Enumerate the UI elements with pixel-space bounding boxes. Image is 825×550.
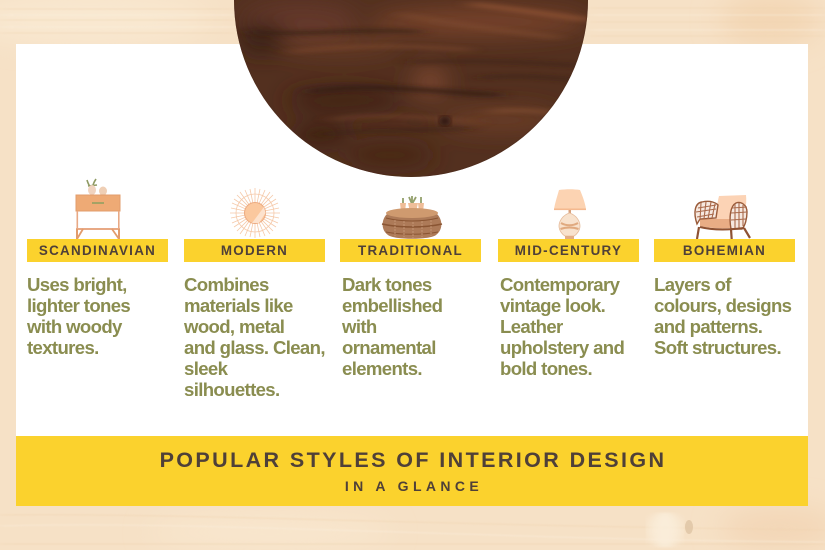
text: Traditional description: embellished — [342, 295, 442, 316]
text: Modern description: Combines — [184, 274, 269, 295]
text: Traditional description: Dark tones — [342, 274, 432, 295]
label: Modern: MODERN — [221, 243, 288, 258]
icon: scandinavian nightstand — [76, 178, 120, 239]
label: Mid-Century — [498, 239, 639, 262]
text: Modern description: materials like — [184, 295, 293, 316]
text: Mid-Century description: vintage look. — [500, 295, 605, 316]
text: Modern description: wood, metal — [184, 316, 284, 337]
text: Bohemian description: Soft structures. — [654, 337, 781, 358]
label: Bohemian: BOHEMIAN — [683, 243, 766, 258]
text: Bohemian description: colours, designs — [654, 295, 791, 316]
text: Modern description: and glass. Clean, — [184, 337, 325, 358]
icon: traditional wicker table — [382, 196, 442, 239]
label: Traditional — [340, 239, 481, 262]
text: Traditional description: with — [342, 316, 377, 337]
icon: modern sunburst mirror — [230, 188, 280, 238]
text: Bohemian description: Layers of — [654, 274, 731, 295]
text: Modern description: sleek — [184, 358, 227, 379]
label: Traditional: TRADITIONAL — [358, 243, 463, 258]
icon: mid-century table lamp — [554, 189, 586, 239]
label: Bohemian — [654, 239, 795, 262]
subtitle: IN A GLANCE — [345, 478, 483, 494]
text: Scandinavian description: textures. — [27, 337, 99, 358]
text: Mid-Century description: bold tones. — [500, 358, 592, 379]
text: Scandinavian description: Uses bright, — [27, 274, 127, 295]
text: Bohemian description: and patterns. — [654, 316, 762, 337]
label: Mid-Century: MID-CENTURY — [515, 243, 622, 258]
text: Mid-Century description: Leather — [500, 316, 563, 337]
decorative wooden semicircle — [234, 0, 588, 177]
text: Bohemian description — [654, 274, 792, 358]
label: Scandinavian: SCANDINAVIAN — [39, 243, 156, 258]
text: Traditional description — [342, 274, 442, 379]
label: Scandinavian — [27, 239, 168, 262]
text: Mid-Century description — [500, 274, 624, 379]
text: Mid-Century description: Contemporary — [500, 274, 619, 295]
text: Traditional description: elements. — [342, 358, 422, 379]
text: Mid-Century description: upholstery and — [500, 337, 624, 358]
icon: bohemian rattan armchair — [694, 195, 751, 239]
text: Scandinavian description: with woody — [27, 316, 122, 337]
text: Traditional description: ornamental — [342, 337, 436, 358]
title: POPULAR STYLES OF INTERIOR DESIGN — [160, 448, 666, 472]
text: Scandinavian description: lighter tones — [27, 295, 130, 316]
text: Modern description — [184, 274, 325, 400]
text: Scandinavian description — [27, 274, 130, 358]
text: Modern description: silhouettes. — [184, 379, 280, 400]
title banner — [16, 436, 808, 506]
label: Modern — [184, 239, 325, 262]
